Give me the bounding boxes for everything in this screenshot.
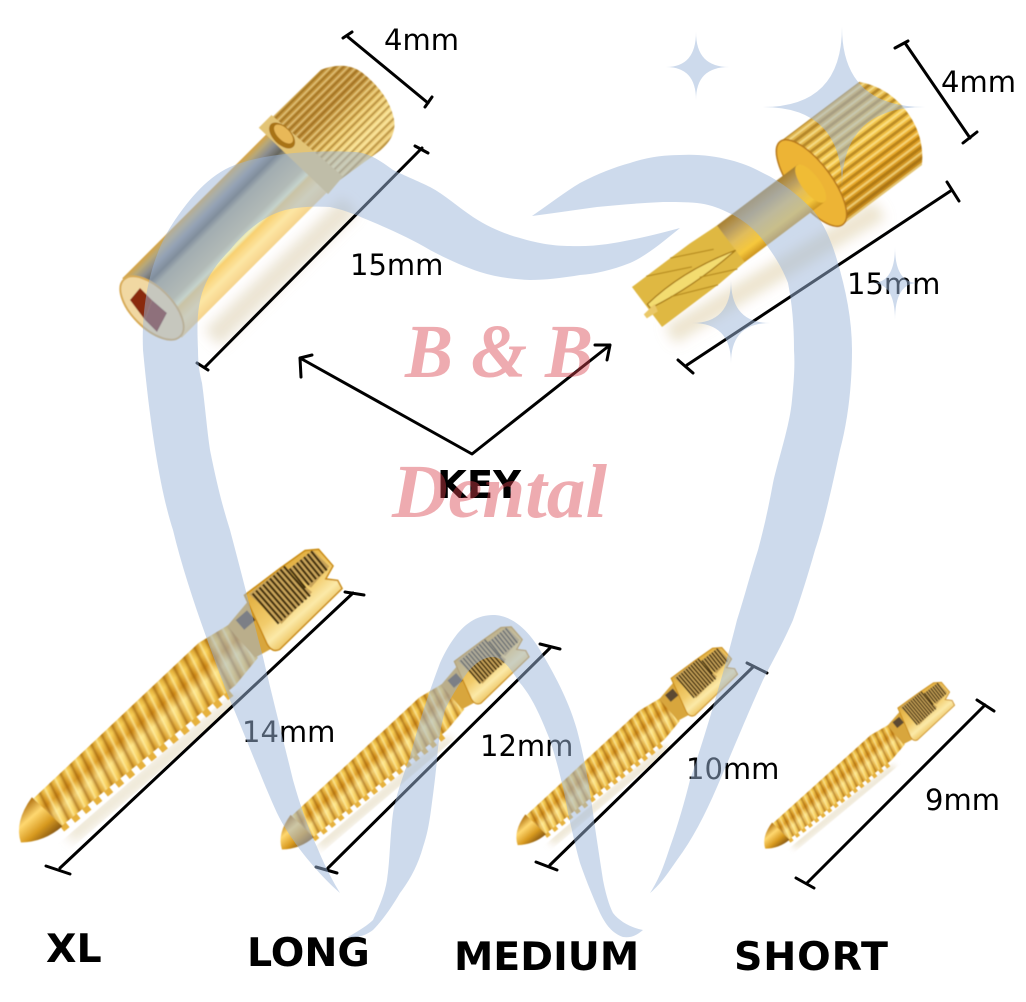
dimension: right key 15mm — [678, 182, 959, 373]
dimension: left key 15mm — [197, 146, 428, 370]
socket end face — [110, 266, 194, 350]
measurement label: 10mm: 10mm — [686, 752, 779, 786]
collar — [259, 110, 344, 196]
measurement label: 14mm: 14mm — [242, 715, 335, 749]
driver shadow — [670, 210, 880, 335]
square socket — [130, 288, 167, 332]
driver shadow — [212, 205, 350, 338]
screw: MEDIUM — [500, 640, 749, 863]
measurement label: 9mm: 9mm — [925, 783, 1000, 817]
knurled head — [779, 70, 938, 225]
heading: KEY: KEY — [437, 463, 522, 508]
dimension: MEDIUM 10mm — [536, 663, 767, 870]
dimension: XL 14mm — [46, 592, 364, 874]
size label: MEDIUM: MEDIUM — [454, 934, 639, 980]
size label: LONG: LONG — [247, 930, 370, 976]
measurement label: 15mm right: 15mm — [847, 267, 940, 301]
screw: SHORT — [750, 676, 964, 864]
watermark: tooth logo with sparkles — [143, 27, 925, 937]
size label: SHORT: SHORT — [734, 934, 888, 980]
measurement label: 4mm left: 4mm — [384, 23, 459, 57]
dimension: left key 4mm — [343, 32, 432, 107]
shaft — [122, 131, 329, 338]
measurement label: 15mm left: 15mm — [350, 248, 443, 282]
knurled head — [269, 49, 411, 191]
dimension: right key 4mm — [895, 41, 977, 143]
fluted tip — [626, 224, 746, 331]
size label: XL: XL — [46, 926, 102, 972]
collar — [764, 129, 859, 237]
watermark text: Dental: Dental — [391, 450, 607, 534]
arrows: key pointers — [300, 345, 610, 454]
key driver: square socket — [101, 48, 411, 358]
shaft — [713, 165, 825, 265]
dimension: SHORT 9mm — [796, 700, 994, 888]
dimension: LONG 12mm — [316, 644, 560, 873]
measurement label: 12mm: 12mm — [480, 729, 573, 763]
screw: XL — [0, 539, 359, 869]
key driver: fluted tip — [610, 70, 938, 353]
watermark text: B & B: B & B — [404, 310, 593, 394]
measurement label: 4mm right: 4mm — [941, 65, 1016, 99]
screw: LONG — [262, 619, 542, 870]
